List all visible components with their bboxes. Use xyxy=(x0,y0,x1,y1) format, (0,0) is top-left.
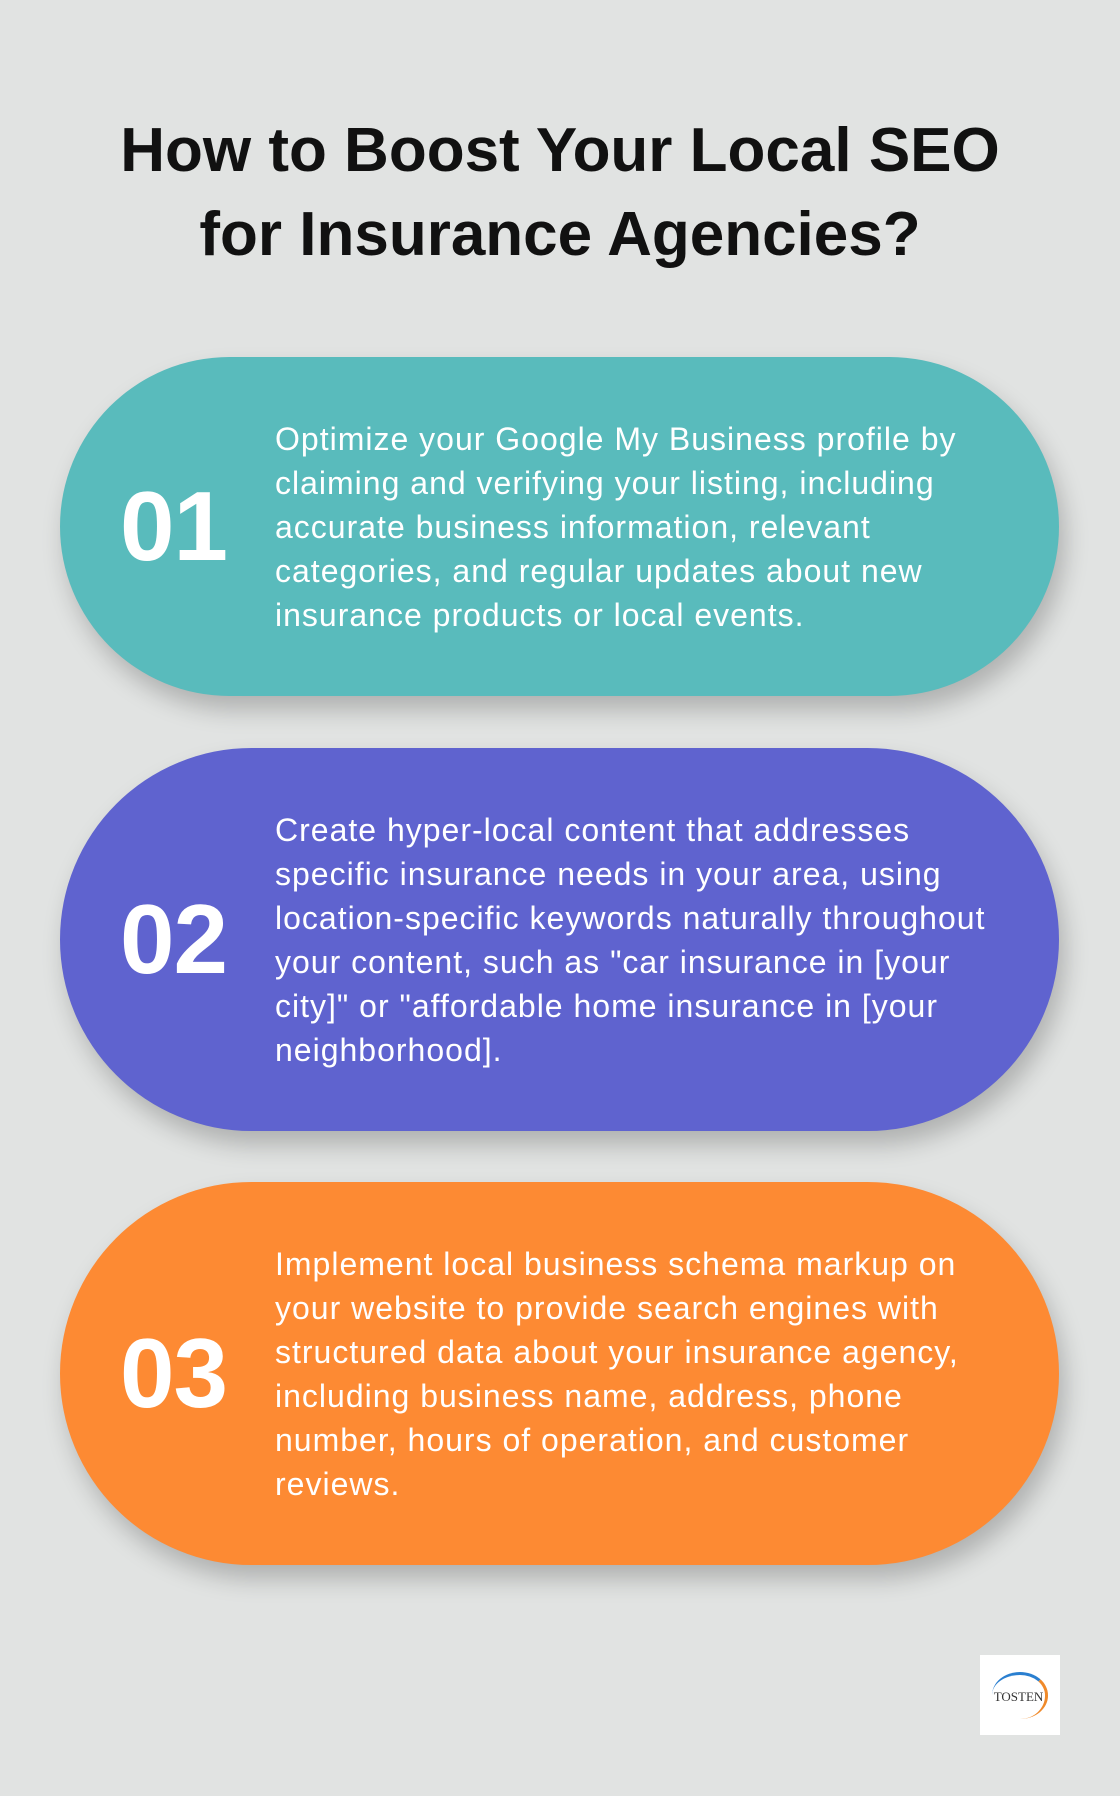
text step 01: claiming and verifying your listing, including xyxy=(275,464,935,500)
text step 01 xyxy=(275,420,956,632)
logo xyxy=(980,1655,1060,1735)
title: How to Boost Your Local SEO xyxy=(120,116,1000,185)
text step 01: Optimize your Google My Business profile by xyxy=(275,420,956,456)
panel: step 02 xyxy=(60,748,1059,1131)
number 03: 03 xyxy=(120,1318,227,1428)
text step 03: reviews. xyxy=(275,1466,400,1502)
text step 03: number, hours of operation, and customer xyxy=(275,1422,909,1458)
text step 02: neighborhood]. xyxy=(275,1032,503,1068)
text step 02: your content, such as "car insurance in [your xyxy=(275,944,950,980)
text step 02: city]" or "affordable home insurance in [your xyxy=(275,988,938,1024)
text step 01: categories, and regular updates about new xyxy=(275,552,923,588)
panel: step 03 xyxy=(60,1182,1059,1565)
text step 02 xyxy=(275,812,985,1068)
text step 02: specific insurance needs in your area, using xyxy=(275,856,942,892)
text step 03: Implement local business schema markup on xyxy=(275,1246,956,1282)
text step 03: including business name, address, phone xyxy=(275,1378,903,1414)
text step 03: structured data about your insurance agency, xyxy=(275,1334,959,1370)
text step 03 xyxy=(275,1246,959,1502)
logo: TOSTEN xyxy=(994,1688,1043,1704)
number 02: 02 xyxy=(120,884,227,994)
text step 01: insurance products or local events. xyxy=(275,596,804,632)
text step 03: your website to provide search engines with xyxy=(275,1290,939,1326)
number 01: 01 xyxy=(120,471,227,581)
title xyxy=(120,116,1000,269)
text step 02: Create hyper-local content that addresses xyxy=(275,812,910,848)
text step 02: location-specific keywords naturally throughout xyxy=(275,900,985,936)
text step 01: accurate business information, relevant xyxy=(275,508,871,544)
title: for Insurance Agencies? xyxy=(199,200,921,269)
panel: step 01 xyxy=(60,357,1059,696)
